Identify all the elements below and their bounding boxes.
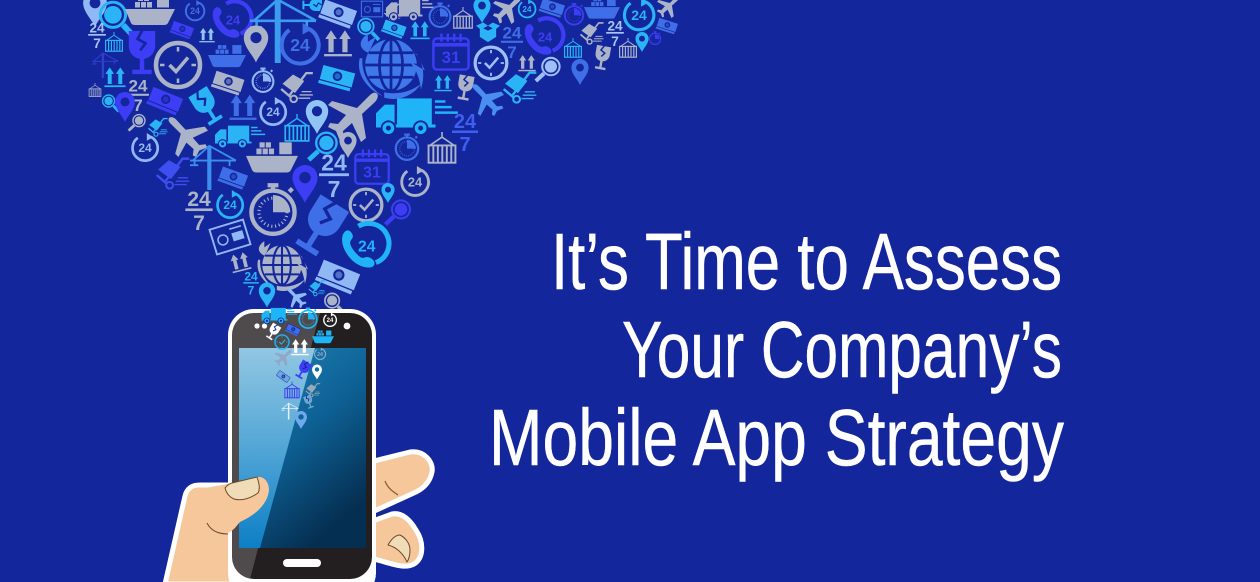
icon: up arrows — [199, 28, 215, 42]
icon: phone 24 — [525, 18, 563, 55]
icon: magnifier — [103, 95, 119, 111]
title — [489, 217, 1064, 482]
icon: crate — [454, 7, 472, 28]
icon: plane — [274, 350, 291, 366]
icon: trolley — [148, 119, 168, 136]
icon: 24/7: 24 — [244, 270, 258, 284]
icon: 24 dial: 24 — [408, 174, 423, 189]
icon: truck — [215, 126, 265, 148]
icon: phone 24: 24 — [538, 30, 553, 45]
icon: 24/7 — [243, 270, 259, 297]
icon: pin — [473, 0, 491, 23]
icon: pin — [244, 26, 268, 62]
icon: 24/7: 24 — [321, 149, 347, 175]
icon: broken glass — [188, 85, 225, 127]
icon: 24/7 — [88, 20, 106, 51]
icon: money — [285, 324, 301, 336]
icons falling into phone screen — [262, 308, 336, 429]
thumb over phone — [190, 477, 269, 534]
icon: magnifier — [129, 115, 145, 131]
icon: money — [539, 0, 565, 18]
icon: stopwatch — [251, 185, 295, 234]
icon: crate — [429, 132, 455, 163]
icon: 24 dial: 24 — [223, 198, 237, 212]
icon: globe — [257, 241, 308, 291]
icon: card — [210, 220, 250, 254]
icon: 24 dial: 24 — [317, 352, 323, 358]
icon: 24/7: 7 — [328, 176, 340, 202]
icon: magnifier — [100, 2, 134, 37]
fingernail — [388, 535, 410, 562]
icon: open box — [476, 22, 500, 42]
icon: trolley — [309, 281, 325, 296]
icon: clock — [350, 189, 382, 221]
icon: crate — [106, 32, 122, 51]
palm — [165, 485, 245, 582]
title line 2: Your Company’s — [622, 305, 1062, 394]
icon: 24 dial — [282, 23, 319, 64]
icon: truck — [376, 98, 458, 135]
icon: pin — [571, 59, 589, 85]
icon: crate — [620, 38, 636, 57]
icon: 24 dial: 24 — [266, 105, 280, 119]
upper finger — [370, 452, 432, 513]
icon: trolley — [306, 384, 320, 397]
lower finger — [370, 514, 422, 566]
icon: pin — [295, 411, 307, 429]
screen glare — [239, 348, 315, 548]
icon: money — [656, 17, 678, 35]
icon: stopwatch — [396, 135, 418, 160]
icon cloud: logistics icons funnelling into phone — [83, 0, 679, 313]
icon: 24 dial: 24 — [290, 35, 310, 55]
icon: card — [361, 1, 383, 17]
body highlight — [232, 313, 320, 579]
icon: phone 24: 24 — [226, 13, 241, 28]
icon: stopwatch — [299, 308, 317, 328]
phone white border — [228, 309, 376, 582]
icon: broken glass — [292, 192, 350, 259]
icon: crate — [89, 83, 101, 96]
icon: 24 dial: 24 — [138, 141, 152, 155]
icon: pin — [292, 165, 318, 203]
icon: plane — [168, 117, 208, 157]
icon: money — [211, 70, 245, 96]
icon: 24 dial — [402, 166, 429, 195]
icon: up arrows — [518, 55, 536, 71]
title line 3: Mobile App Strategy — [489, 393, 1064, 482]
icon: plane — [287, 288, 307, 308]
icon: glass — [593, 44, 611, 71]
icon: crane — [92, 53, 118, 78]
icon: money — [217, 166, 249, 190]
icon: 24 dial: 24 — [327, 318, 334, 324]
icon: 24 dial — [519, 0, 535, 17]
icon: up arrows — [104, 67, 126, 87]
icon: trolley — [580, 23, 604, 44]
icon: 24/7: 24 — [129, 77, 148, 96]
icon: crane — [190, 146, 236, 190]
icon: money — [276, 370, 290, 384]
icon: 24/7: 24 — [187, 188, 211, 211]
icon: 24/7 — [127, 77, 149, 115]
icon: plane — [493, 0, 521, 24]
icon: calendar: 31 — [442, 48, 460, 67]
icon: clock — [275, 335, 289, 349]
icon: 24/7: 7 — [459, 134, 471, 156]
title line 1: It’s Time to Assess — [551, 217, 1062, 306]
icon: 24 dial: 24 — [523, 5, 532, 14]
icon: 24/7: 7 — [193, 212, 205, 235]
icon: truck — [262, 308, 297, 324]
icon: trolley — [157, 159, 189, 189]
icon: calendar — [355, 150, 389, 184]
icon: 24/7: 7 — [93, 36, 101, 51]
icon: pin — [312, 364, 322, 380]
icon: 24 dial — [261, 97, 286, 125]
icon: money — [318, 0, 358, 29]
finger crease — [385, 481, 398, 495]
thumb crease — [207, 523, 228, 534]
icon: glass — [302, 0, 323, 11]
icon: glass — [265, 322, 282, 341]
icon: 24 dial — [186, 0, 204, 20]
icon: money — [381, 19, 407, 39]
icon: globe — [359, 34, 425, 99]
icon: broken glass — [129, 29, 155, 74]
icon: ship — [584, 0, 620, 19]
icon: pin — [339, 132, 357, 158]
icon: plane — [657, 0, 679, 18]
icon: trolley — [504, 73, 536, 103]
icon: ship — [312, 331, 334, 343]
icon: magnifier — [385, 200, 410, 224]
icon: stopwatch — [253, 69, 273, 92]
icon: crane — [282, 403, 298, 420]
icon: up arrows — [230, 95, 256, 120]
icon: glass — [456, 73, 475, 101]
home button — [283, 559, 321, 567]
icon: 24/7: 7 — [133, 96, 143, 115]
icon: stopwatch — [649, 32, 661, 44]
icon: 24/7: 7 — [507, 43, 517, 62]
icon: 24 dial: 24 — [190, 6, 200, 16]
icon: crate — [285, 382, 299, 398]
icon: 24/7 — [319, 149, 349, 202]
icon: money — [169, 20, 195, 40]
icon: phone 24 — [342, 223, 389, 268]
icon: up arrows — [410, 21, 430, 39]
icon: magnifier — [309, 133, 337, 160]
icon: 24/7: 24 — [503, 24, 522, 43]
thumb shape — [190, 477, 269, 534]
icon: phone 24: 24 — [358, 239, 376, 256]
icon: up arrows — [229, 251, 252, 273]
thumbnail — [225, 477, 259, 500]
icon: calendar: 31 — [363, 165, 381, 182]
hand: palm and fingers behind phone — [165, 452, 432, 582]
camera dots — [254, 323, 350, 329]
icon: 24/7: 24 — [454, 111, 477, 133]
icon: stopwatch — [565, 4, 583, 25]
icon: money — [318, 64, 356, 92]
icon: pin — [306, 100, 328, 134]
icon: crate — [565, 38, 581, 57]
icon: phone 24 — [213, 1, 251, 38]
icon: 24/7 — [185, 188, 213, 235]
screen — [239, 348, 366, 548]
icon: pin — [115, 92, 135, 122]
icon: calendar — [433, 34, 469, 70]
icon: crate — [285, 114, 309, 141]
icon: glass — [303, 394, 315, 409]
icon: 24/7: 24 — [89, 20, 105, 35]
icon: pin — [83, 0, 107, 27]
icon: 24/7 — [606, 18, 624, 49]
icon: stopwatch — [430, 4, 450, 27]
icon: ship — [246, 142, 298, 172]
icon: pin — [635, 32, 649, 52]
icon: up arrows — [324, 30, 352, 56]
icon: magnifier — [325, 293, 344, 313]
icon: crane — [250, 0, 316, 63]
icon: 24 dial: 24 — [631, 7, 647, 23]
icon: money — [146, 86, 184, 116]
icon: pin — [259, 282, 275, 308]
icon: up arrows — [291, 339, 309, 355]
icon: pin — [381, 183, 395, 203]
icon: magnifier — [358, 19, 379, 40]
icon: glass — [294, 359, 313, 380]
icon: 24/7 — [452, 111, 478, 156]
icon: plane — [472, 84, 504, 116]
smartphone — [228, 309, 376, 582]
icon: truck — [386, 0, 436, 21]
icon: 24/7 — [501, 24, 523, 62]
icon: 24/7: 7 — [611, 34, 619, 49]
icon: trolley — [384, 4, 402, 20]
icon: ship — [208, 45, 246, 67]
icon: clock — [475, 47, 507, 79]
icon: plane — [328, 93, 378, 142]
icon: magnifier — [536, 58, 560, 81]
icon: 24 dial — [624, 0, 654, 30]
icon: 24 dial — [218, 190, 243, 218]
icon: 24 dial — [133, 133, 158, 161]
icon: 24/7: 7 — [248, 283, 255, 297]
icon: money — [315, 259, 361, 295]
icon: clock — [156, 43, 200, 87]
icon: ship — [125, 0, 175, 25]
icon: up arrows — [434, 75, 452, 91]
icon: 24/7: 24 — [607, 18, 623, 33]
icon: trolley — [281, 73, 313, 102]
phone body — [232, 313, 372, 579]
